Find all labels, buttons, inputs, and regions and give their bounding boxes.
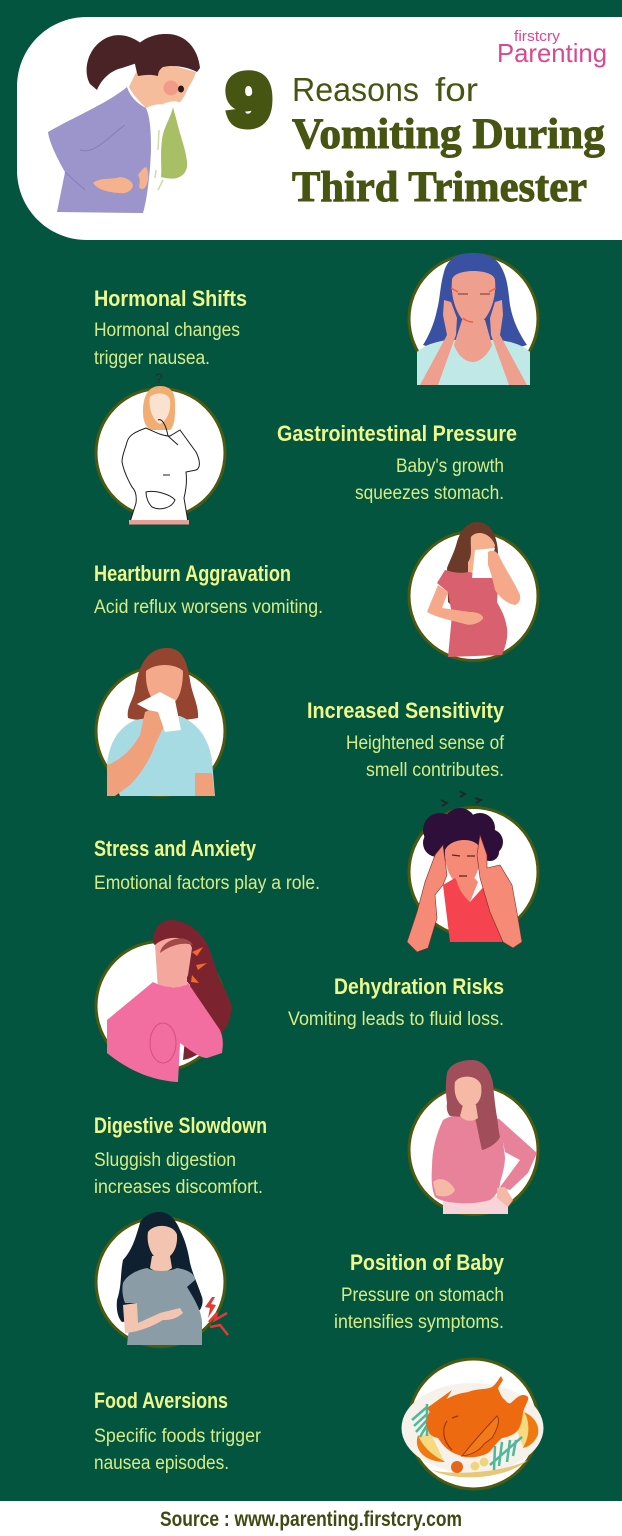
reason 7: Digestive Slowdown (94, 1060, 538, 1214)
icon: woman covering mouth (96, 920, 232, 1082)
icon: worried woman in white: ? (155, 370, 163, 386)
description: Sluggish digestion (94, 1150, 236, 1171)
reason 1: Hormonal Shifts: trigger nausea. (94, 348, 210, 369)
icon: woman with stomach pain (96, 1212, 228, 1346)
heading: Digestive Slowdown (94, 1113, 267, 1138)
description: Vomiting leads to fluid loss. (288, 1009, 504, 1030)
heading: Hormonal Shifts (94, 286, 247, 311)
header banner (17, 17, 622, 240)
logo: firstcry Parenting: firstcry (514, 28, 561, 45)
description: Specific foods trigger (94, 1426, 262, 1447)
description: Heightened sense of (346, 733, 505, 754)
icon: pregnant woman with tissue (409, 522, 538, 660)
description: Pressure on stomach (341, 1285, 504, 1306)
reason 9: Food Aversions: nausea episodes. (94, 1453, 229, 1474)
source text: Source : www.parenting.firstcry.com (160, 1508, 462, 1531)
title line: Vomiting During: Vomiting During (292, 111, 606, 158)
reason 9: Food Aversions (94, 1359, 544, 1489)
title line: Reasons for: for (435, 71, 478, 108)
title line: Reasons for: Reasons (292, 71, 419, 108)
description: Baby's growth (396, 456, 504, 477)
heading: Stress and Anxiety (94, 836, 257, 861)
reason 8: Position of Baby: intensifies symptoms. (334, 1312, 504, 1333)
heading: Dehydration Risks (334, 974, 504, 999)
illustration: woman vomiting (48, 34, 200, 213)
reason 7: Digestive Slowdown: increases discomfort. (94, 1177, 263, 1198)
description: Emotional factors play a role. (94, 873, 320, 894)
footer source bar (0, 1501, 622, 1536)
heading: Position of Baby (350, 1250, 505, 1275)
reason 2: Gastrointestinal Pressure (96, 370, 517, 524)
reason 2: Gastrointestinal Pressure: squeezes stomach. (355, 483, 504, 504)
icon: roast turkey on plate (402, 1359, 544, 1489)
reason 4: Increased Sensitivity (96, 648, 505, 796)
description: Acid reflux worsens vomiting. (94, 597, 323, 618)
title line: Third Trimester: Third Trimester (292, 164, 587, 211)
title number 9: 9 (227, 61, 271, 141)
reason 3: Heartburn Aggravation (94, 522, 538, 660)
heading: Heartburn Aggravation (94, 561, 291, 586)
heading: Gastrointestinal Pressure (277, 421, 517, 446)
reason 5: Stress and Anxiety (94, 791, 538, 952)
heading: Food Aversions (94, 1388, 228, 1413)
description: Hormonal changes (94, 320, 240, 341)
icon: worried woman in white (96, 370, 225, 524)
reason 6: Dehydration Risks (96, 920, 504, 1082)
logo: firstcry Parenting: Parenting (497, 38, 607, 68)
icon: pregnant woman in pink (409, 1060, 538, 1214)
icon: woman blowing nose (96, 648, 225, 796)
reason 4: Increased Sensitivity: smell contributes. (366, 760, 504, 781)
reason 8: Position of Baby (96, 1212, 505, 1346)
icon: woman with headache (409, 253, 538, 385)
reason 1: Hormonal Shifts (94, 253, 538, 385)
icon: stressed woman with hands on head (407, 791, 538, 952)
heading: Increased Sensitivity (307, 698, 505, 723)
